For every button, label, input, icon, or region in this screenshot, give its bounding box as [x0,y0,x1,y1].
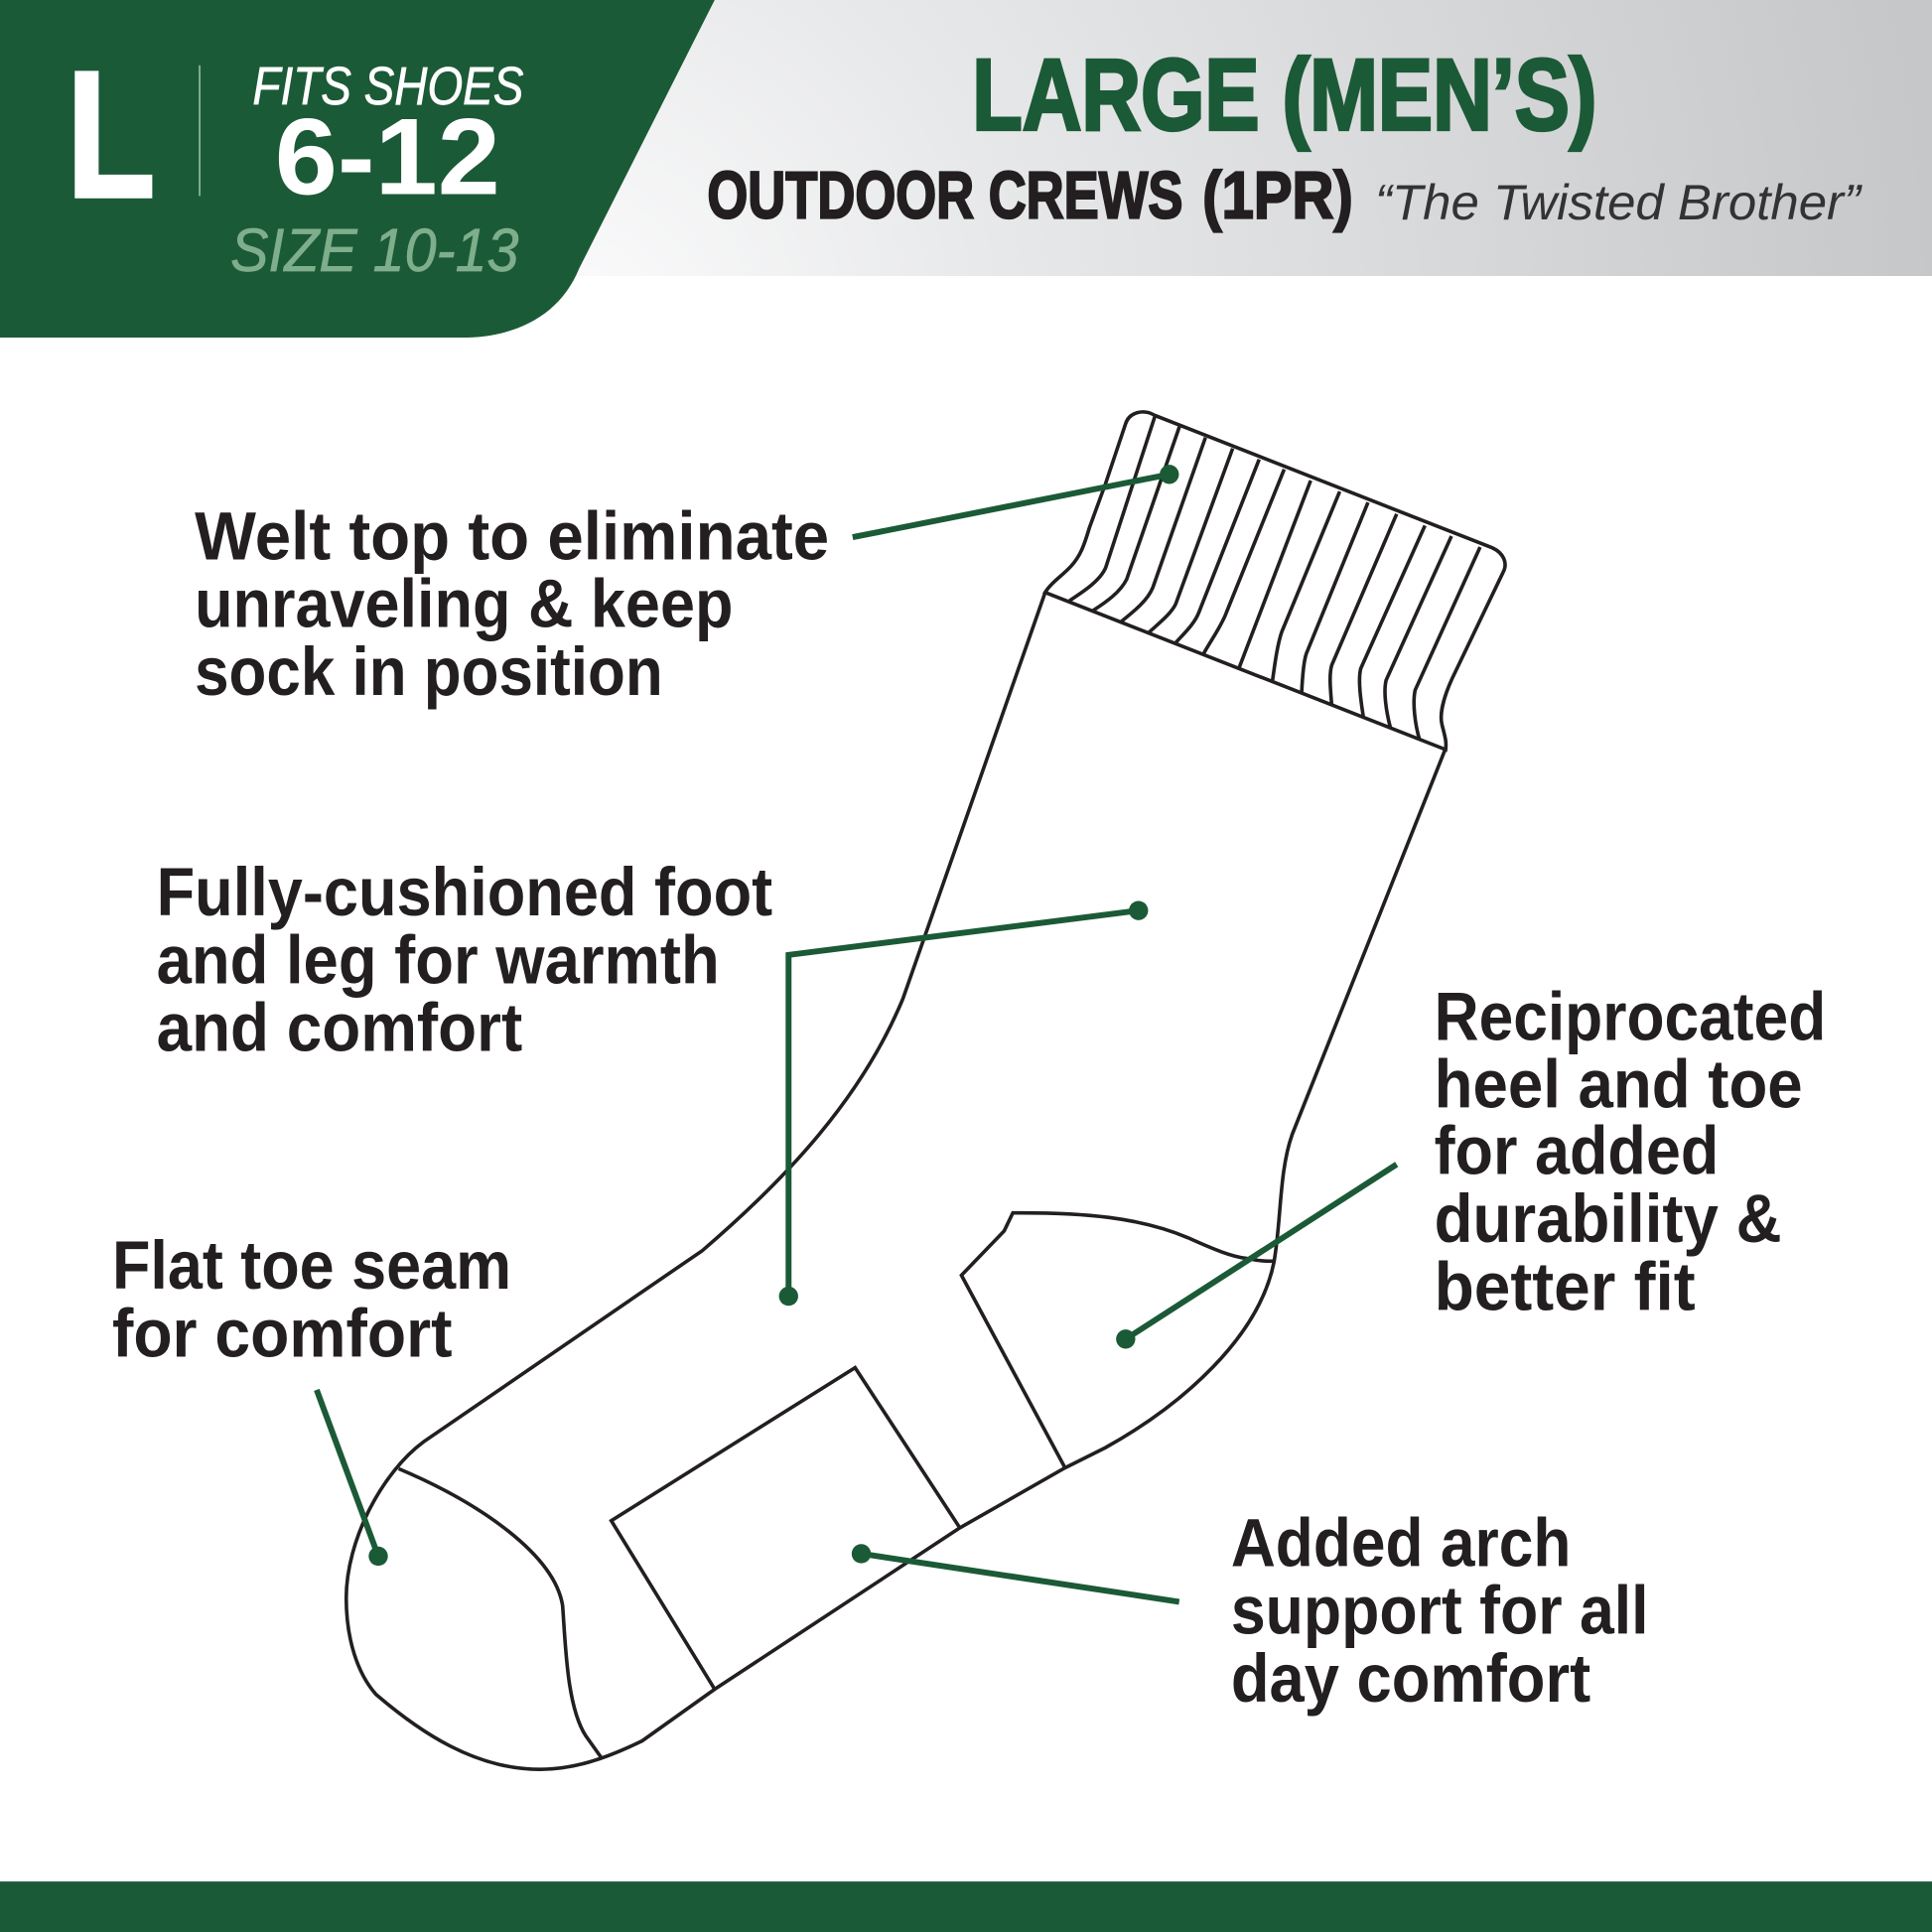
welt text [195,498,829,710]
toe seam [399,1468,603,1759]
arch text: Added arch [1231,1505,1571,1581]
cushioning text: Fully-cushioned foot [157,855,772,930]
sock size range: SIZE 10-13 [230,216,519,284]
toe leader line [317,1390,378,1556]
title: LARGE (MEN’S) [972,38,1596,151]
product nickname: “The Twisted Brother” [1375,175,1863,230]
sock body outline [346,593,1446,1769]
arch leader line [862,1554,1179,1601]
welt text: Welt top to eliminate [195,498,829,574]
toe text: for comfort [112,1296,452,1371]
arch text [1231,1505,1649,1717]
arch support panel [612,1368,960,1690]
cushioning text: and leg for warmth [157,922,720,998]
pair count: (1PR) [1202,159,1353,233]
welt text: sock in position [195,634,663,710]
product name: OUTDOOR CREWS [707,159,1182,233]
heel text [1435,979,1826,1324]
header band [0,0,1932,276]
cushioning dots [779,900,1148,1306]
welt text: unraveling & keep [195,567,733,642]
callout: arch support [852,1505,1649,1717]
heel text: heel and toe [1435,1047,1803,1123]
heel text: for added [1435,1114,1719,1189]
cushioning text [157,855,772,1066]
badge background [0,0,715,338]
size letter: L [67,35,155,235]
cuff ribs [1069,417,1480,740]
heel text: durability & [1435,1181,1782,1257]
arch text: support for all [1231,1574,1649,1649]
heel dot [1116,1329,1136,1348]
cushioning text: and comfort [157,991,522,1066]
heel leader line [1126,1165,1397,1339]
cushioning leader line [788,910,1139,1297]
size badge [0,0,715,338]
callout: toe seam [112,1228,511,1566]
callout: cushioning [157,855,1148,1306]
heel text: better fit [1435,1249,1696,1324]
callout: heel and toe [1116,979,1826,1348]
callout: welt top [195,465,1178,710]
heel text: Reciprocated [1435,979,1826,1054]
toe dot [368,1547,388,1566]
sock illustration [346,412,1505,1769]
fits shoes label: FITS SHOES [252,58,524,116]
footer bar [0,1881,1932,1932]
welt cuff [1045,412,1505,750]
heel panel [961,1213,1275,1467]
arch text: day comfort [1231,1641,1590,1717]
subtitle [707,159,1863,233]
shoe size range: 6-12 [275,96,500,217]
toe text [112,1228,511,1371]
badge divider [199,66,201,196]
cuff outline [1045,412,1505,750]
arch dot [852,1544,871,1564]
welt leader line [853,475,1170,537]
welt dot [1160,465,1178,483]
toe text: Flat toe seam [112,1228,511,1304]
